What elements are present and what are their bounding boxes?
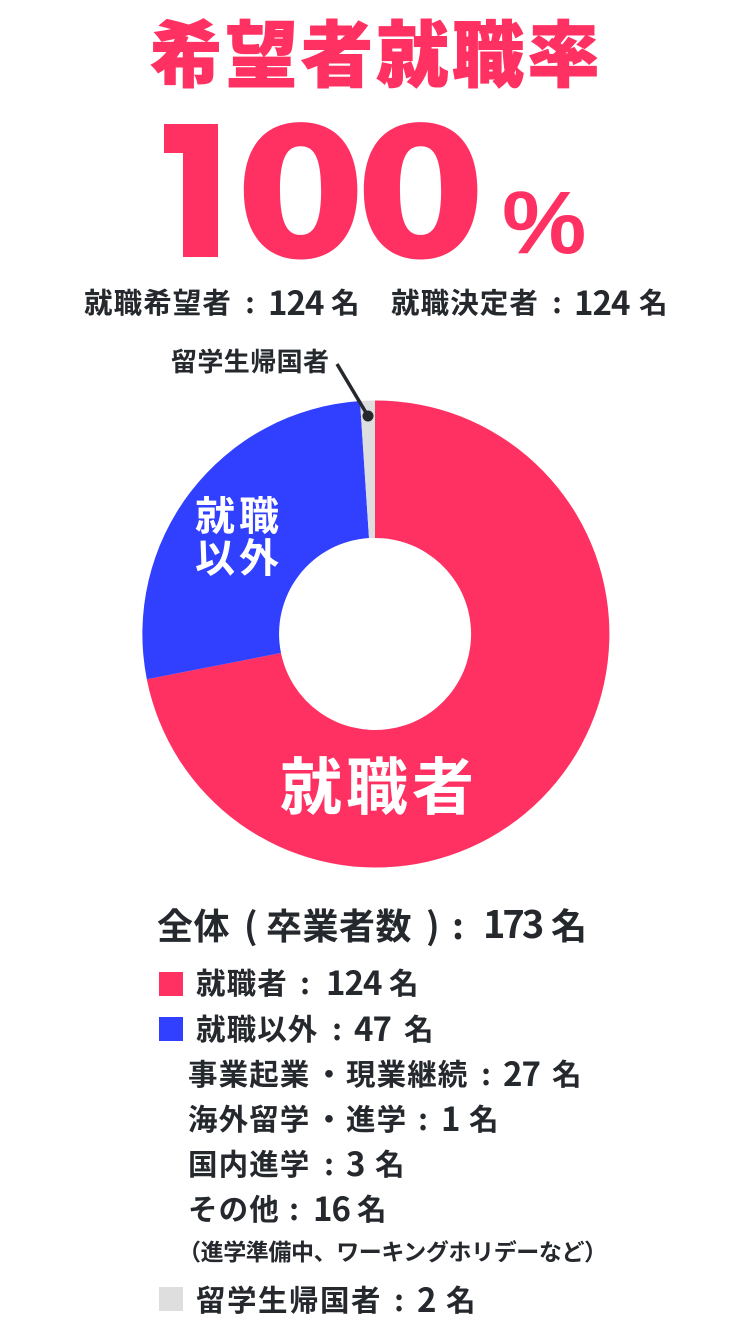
legend heading: 全体	[157, 898, 230, 950]
legend row: other: 名	[404, 1007, 435, 1049]
legend heading: 卒業者数	[266, 898, 412, 950]
swatch: returning	[159, 1287, 183, 1311]
summary counts: 名	[331, 281, 361, 322]
legend heading: )	[426, 898, 441, 950]
headline stat: 100%: 0	[355, 52, 486, 309]
segment: employed	[147, 400, 609, 867]
legend row: others: その他	[188, 1187, 280, 1229]
legend row: startup	[188, 1048, 583, 1096]
legend row: study abroad: 進学	[346, 1097, 407, 1139]
callout label: 留学生帰国者	[171, 342, 329, 379]
legend row: returning: 2	[417, 1274, 435, 1322]
legend row: domestic study: 国内進学	[188, 1142, 310, 1184]
summary counts: 名	[639, 281, 669, 322]
legend row: other: 就職以外	[196, 1007, 318, 1049]
legend row: study abroad	[188, 1093, 500, 1141]
summary counts: 124	[268, 277, 323, 325]
legend row: study abroad: 海外留学	[188, 1097, 310, 1139]
legend row: employed: 124	[326, 957, 381, 1005]
legend heading: :	[452, 898, 464, 950]
legend row: startup: 事業起業	[188, 1052, 310, 1094]
headline stat: 100%: 0	[235, 52, 366, 309]
legend row: other	[196, 1003, 435, 1051]
donut label: other than employment: 就職	[195, 484, 283, 542]
legend row: domestic study: :	[324, 1142, 334, 1184]
legend heading: 名	[551, 898, 588, 950]
summary counts: :	[552, 281, 562, 322]
legend row: startup: ・	[314, 1052, 344, 1094]
legend row: employed: :	[300, 961, 310, 1003]
percent sign: %	[502, 173, 586, 272]
swatch: employed	[159, 972, 183, 996]
legend row: employed: 名	[389, 961, 420, 1003]
legend heading: 173	[483, 894, 541, 949]
legend row: employed	[196, 957, 420, 1005]
segment: other than employment	[142, 401, 369, 679]
legend row: domestic study: 名	[375, 1142, 406, 1184]
summary counts: 124	[574, 277, 629, 325]
legend heading	[157, 894, 588, 950]
donut chart	[142, 363, 610, 868]
legend row: returning	[196, 1274, 477, 1322]
legend row: study abroad: 1	[441, 1093, 459, 1141]
legend row: study abroad: 名	[469, 1097, 500, 1139]
legend row: employed: 就職者	[196, 961, 288, 1003]
legend row: others: 16	[313, 1183, 350, 1231]
segment: returning international students	[360, 400, 375, 538]
summary counts: :	[245, 281, 255, 322]
legend row: others	[188, 1183, 388, 1231]
donut label: other than employment: 以外	[195, 526, 283, 584]
legend row: other: :	[332, 1007, 342, 1049]
legend row: others: :	[289, 1187, 299, 1229]
legend heading: (	[244, 898, 259, 950]
legend row: study abroad: :	[418, 1097, 428, 1139]
donut label: employed: 就職者	[280, 737, 478, 827]
summary counts	[84, 277, 669, 325]
summary counts: 就職決定者	[391, 281, 539, 322]
callout leader line	[337, 364, 374, 422]
donut label: other than employment	[195, 484, 283, 584]
title: 希望者就職率	[150, 0, 603, 102]
legend row: startup: 名	[552, 1052, 583, 1094]
swatch: other	[159, 1017, 183, 1041]
legend row: returning: 名	[446, 1278, 477, 1320]
legend row: startup: 27	[503, 1048, 540, 1096]
legend row: others: 名	[357, 1187, 388, 1229]
legend note: （進学準備中、ワーキングホリデーなど）	[178, 1233, 607, 1267]
legend row: startup: :	[481, 1052, 491, 1094]
legend row: domestic study: 3	[346, 1138, 364, 1186]
summary counts: 就職希望者	[84, 281, 232, 322]
legend row: other: 47	[354, 1003, 391, 1051]
legend row: study abroad: ・	[314, 1097, 344, 1139]
headline stat: 100%	[164, 52, 586, 309]
legend row: returning: :	[394, 1278, 404, 1320]
legend row: domestic study	[188, 1138, 406, 1186]
legend row: startup: 現業継続	[346, 1052, 468, 1094]
legend row: returning: 留学生帰国者	[196, 1278, 382, 1320]
